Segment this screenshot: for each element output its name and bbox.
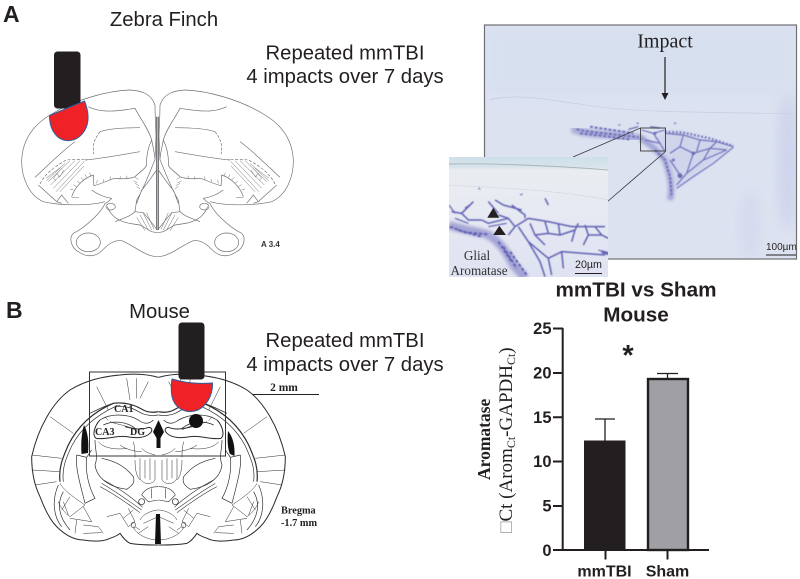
label: Glial Aromatase (450, 248, 508, 278)
arrowheads (487, 208, 506, 235)
text: finch protocol: Repeated mmTBI (266, 42, 424, 64)
y axis numbers: 20 (533, 364, 552, 382)
scale bar: 100 um: 100µm (766, 242, 797, 253)
x labels (577, 564, 689, 579)
aromatase network (575, 123, 733, 200)
ventricles (81, 420, 235, 544)
hippocampal section box (90, 372, 226, 456)
y axis numbers: 15 (533, 409, 552, 427)
y axis numbers: 25 (533, 320, 552, 338)
scale bar: 2 mm (253, 382, 319, 394)
label: Glial Aromatase: Glial (464, 248, 491, 263)
atlas label A 3.4: A 3.4 (261, 240, 280, 249)
text: mouse protocol: 4 impacts over 7 days (246, 354, 444, 376)
y axis numbers (533, 320, 552, 560)
y axis label: -GAPDH (496, 365, 517, 437)
aromatase network detail (449, 188, 608, 278)
label: Bregma -1.7 mm (281, 506, 317, 529)
inset micrograph: glial aromatase (449, 157, 608, 278)
zebra finch brain atlas section (22, 90, 293, 257)
y axis numbers: 0 (542, 542, 552, 560)
scale bar: 20 um: 20µm (575, 259, 602, 271)
mouse hippocampus labels: CA1 (114, 404, 133, 415)
panel label B: B (6, 297, 23, 323)
error bar: Sham (657, 374, 678, 379)
heading: Zebra Finch: Zebra Finch (110, 9, 218, 31)
scale bar: 2 mm: 2 mm (270, 382, 298, 394)
mouse hippocampus labels: DG (130, 427, 145, 438)
bar: Sham (648, 379, 688, 550)
icon: mouse impact zone (171, 379, 213, 412)
icon: mouse impactor (178, 322, 204, 380)
y axis label: ) (496, 347, 517, 354)
label: Bregma -1.7 mm: -1.7 mm (281, 518, 317, 529)
heading: Mouse: Mouse (129, 301, 190, 323)
label: Glial Aromatase: Aromatase (450, 263, 508, 278)
arrow: impact direction (662, 57, 668, 100)
text: finch protocol (246, 42, 444, 88)
mouse hippocampus labels (95, 404, 145, 438)
bar chart (474, 320, 709, 579)
micrograph: impact site (484, 25, 798, 260)
significance star: * (622, 340, 634, 372)
icon: injury dot (189, 414, 203, 428)
mouse brain atlas section (32, 374, 285, 545)
chart title: Mouse (603, 304, 669, 326)
bar: mmTBI (584, 440, 626, 550)
y axis ticks (553, 328, 709, 560)
text: mouse protocol (246, 330, 444, 376)
zoom connector lines (573, 128, 666, 202)
y axis numbers: 5 (542, 498, 552, 516)
y axis label: □Ct (Arom (496, 448, 517, 533)
icon: finch impactor (54, 52, 80, 108)
y axis label: Ct (504, 353, 518, 365)
label: Bregma -1.7 mm: Bregma (281, 506, 316, 516)
text: mouse protocol: Repeated mmTBI (266, 330, 424, 352)
y axis label (474, 347, 518, 533)
chart title (556, 278, 716, 326)
zoom box (640, 128, 666, 151)
mouse hippocampus labels: CA3 (95, 427, 114, 438)
text: finch protocol: 4 impacts over 7 days (246, 66, 444, 88)
panel label A: A (3, 1, 20, 27)
chart title: mmTBI vs Sham (556, 278, 716, 302)
error bar: mmTBI (595, 419, 615, 441)
label: Impact: Impact (637, 30, 693, 52)
y axis label: Aromatase (474, 398, 494, 480)
icon: finch impact zone (50, 101, 88, 141)
y axis label: Ct (504, 436, 518, 448)
y axis numbers: 10 (533, 453, 552, 471)
